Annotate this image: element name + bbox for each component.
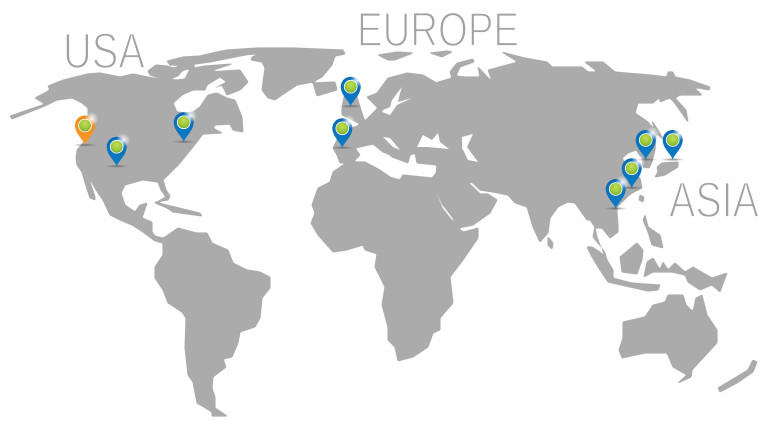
landmass: Iceland xyxy=(313,82,337,96)
pin: blue, UK xyxy=(339,73,364,108)
landmass: New Zealand xyxy=(718,360,757,392)
pin: blue, South China xyxy=(604,176,629,210)
landmass: Australia xyxy=(619,295,717,383)
sea: Black Sea xyxy=(417,133,449,149)
landmass: Svalbard xyxy=(378,52,413,60)
landmass: Sulawesi and New Guinea xyxy=(644,258,727,292)
label: USA: USA xyxy=(63,23,146,79)
pin: blue, US central xyxy=(105,133,130,168)
inland seas xyxy=(382,87,478,162)
pin: blue, US east xyxy=(172,109,197,143)
sea: Adriatic xyxy=(383,137,400,150)
pin: blue, Japan xyxy=(661,126,686,161)
landmass: Africa xyxy=(311,162,478,361)
pin: blue, Spain xyxy=(330,115,356,149)
pin: orange, US west coast xyxy=(73,112,98,147)
landmass: Franz Josef Land xyxy=(430,51,452,57)
landmass: Eurasia xyxy=(333,52,710,291)
landmass: Philippines xyxy=(643,215,663,248)
landmass: Americas xyxy=(10,64,270,416)
sea: Caspian xyxy=(462,134,478,162)
pin: blue, Korea xyxy=(634,126,659,161)
pin: blue, East China xyxy=(620,155,645,189)
landmass: Victoria island xyxy=(148,65,195,78)
landmass: Britain xyxy=(342,90,365,124)
landmass: Taiwan xyxy=(639,195,644,202)
landmass: Borneo xyxy=(620,243,643,274)
landmass: Arctic islands and Greenland xyxy=(167,48,345,100)
label: EUROPE: EUROPE xyxy=(357,4,519,57)
landmass: Sakhalin xyxy=(652,121,663,139)
landmass: Japan xyxy=(655,162,678,177)
sea: Baltic xyxy=(382,87,412,115)
landmass: Sri Lanka xyxy=(548,237,553,249)
